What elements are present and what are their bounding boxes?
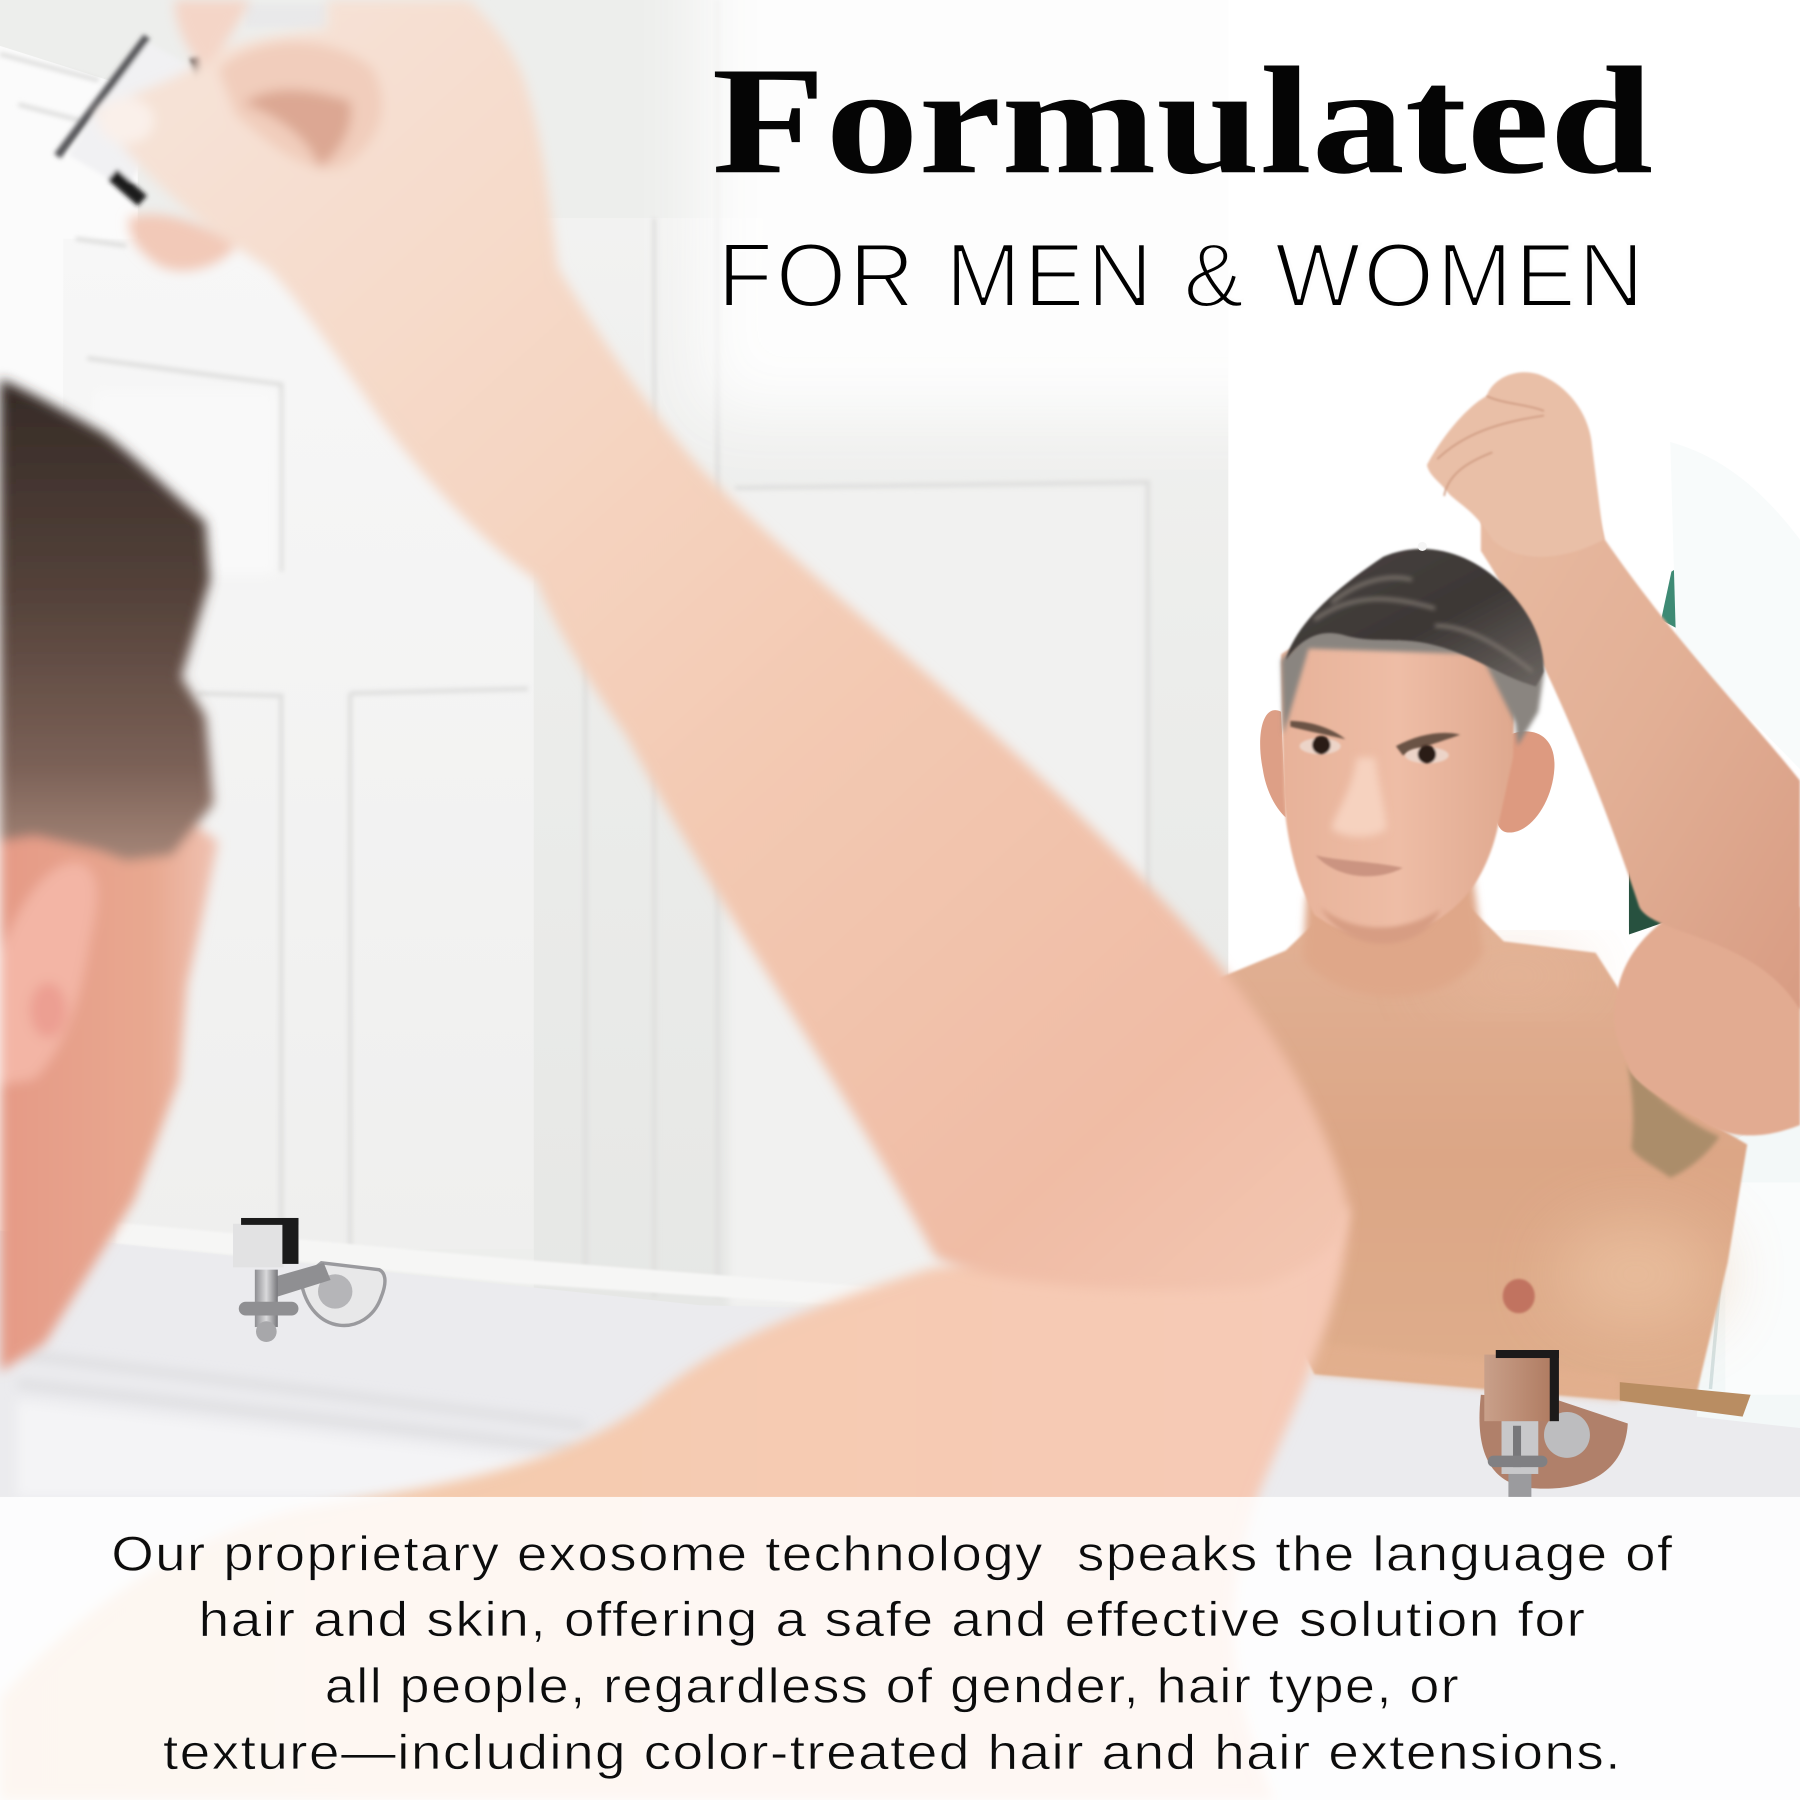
neck and skin [0, 792, 218, 1372]
face [1281, 637, 1515, 937]
finger gap [243, 90, 351, 168]
fingertip highlight [99, 98, 154, 143]
hair sides [1281, 620, 1544, 746]
mouth [1316, 855, 1403, 876]
foreground head (blurred) [0, 379, 218, 1372]
nipple [1503, 1279, 1535, 1313]
title: Formulated: Formulated [712, 36, 1653, 206]
eyes [1299, 736, 1449, 763]
foreground arm and fist (blurred) [94, 0, 1346, 1290]
hair [0, 379, 214, 861]
lower wall below mirror [0, 1223, 1800, 1800]
caption backdrop band [0, 1497, 1800, 1800]
bright haze behind heading [700, 0, 1343, 413]
eyebrows [1290, 721, 1460, 755]
grey hair streaks [1314, 578, 1533, 672]
product drop [1418, 542, 1427, 551]
caption paragraph: texture—including color-treated hair and hair extensions. [163, 1725, 1622, 1780]
subtitle: FOR MEN & WOMEN: FOR MEN & WOMEN [717, 226, 1644, 327]
hair [1286, 549, 1544, 686]
chest highlights and shading [1314, 955, 1751, 1417]
left ear [1260, 710, 1286, 817]
nose [1332, 758, 1387, 837]
thumb [129, 214, 235, 271]
armpit hair [1628, 1064, 1720, 1178]
torso [1219, 907, 1747, 1407]
caption paragraph [111, 1526, 1674, 1780]
finger creases [1437, 396, 1544, 496]
green reflection behind arm [1629, 442, 1800, 934]
right mirrored door panel [1697, 1102, 1800, 1428]
neck [1303, 849, 1483, 997]
mirror clip: reflected [1479, 1350, 1628, 1497]
foreground shoulder and upper arm (blurred) [0, 1205, 1349, 1800]
caption paragraph: all people, regardless of gender, hair type, or [325, 1658, 1460, 1713]
ear [0, 863, 97, 1085]
chin shadow [1320, 907, 1441, 944]
right ear [1496, 731, 1554, 833]
forearm [1481, 482, 1800, 1010]
mirrored man [1219, 372, 1800, 1417]
upper fingers [174, 0, 250, 69]
dropper (blurred) [57, 5, 326, 201]
caption paragraph: hair and skin, offering a safe and effective solution for [199, 1592, 1586, 1647]
raised bicep [1614, 907, 1800, 1135]
bright window area in mirror [1228, 0, 1800, 999]
forearm with hand back [94, 0, 1346, 1290]
caption paragraph: Our proprietary exosome technology speaks the language of [111, 1526, 1674, 1581]
mirror clip: front [233, 1218, 385, 1342]
hand [1427, 372, 1604, 557]
